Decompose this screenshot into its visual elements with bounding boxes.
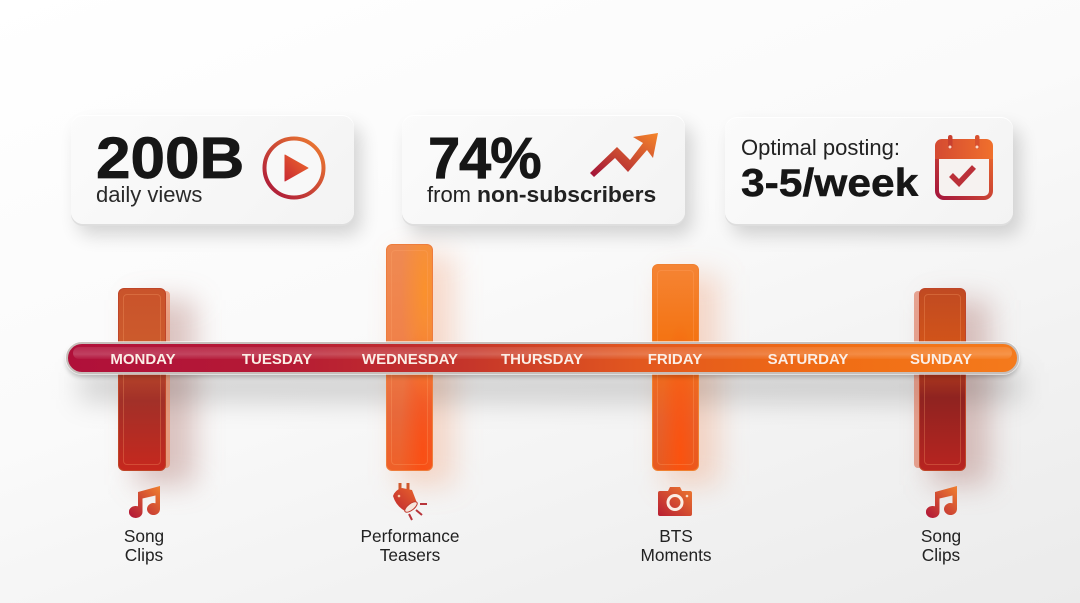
label: BTS Moments (640, 526, 712, 565)
label: Song Clips Monday: Clips (125, 545, 163, 565)
label: BTS Moments: BTS (659, 526, 693, 546)
text: THURSDAY (501, 351, 583, 368)
day labels (110, 351, 972, 368)
label: Song Clips Monday (124, 526, 164, 565)
label: Song Clips Sunday (921, 526, 961, 565)
timeline bar (66, 342, 1019, 374)
label: from non-subscribers: from (427, 182, 471, 207)
icon: calendar with check (935, 135, 993, 200)
text: MONDAY (110, 351, 176, 368)
icon: play button (262, 136, 326, 200)
label: Performance Teasers (361, 526, 459, 565)
label: Song Clips Sunday: Song (921, 526, 961, 546)
bar: Sunday (914, 288, 966, 471)
panel: 74% from non-subscribers (402, 115, 685, 224)
label: Performance Teasers: Teasers (380, 545, 440, 565)
icon: music note Monday (129, 486, 160, 518)
text: SATURDAY (768, 351, 848, 368)
label: Optimal posting: Optimal posting: (741, 135, 900, 160)
label: Song Clips Sunday: Clips (922, 545, 960, 565)
text: FRIDAY (648, 351, 702, 368)
stat: 200B: 200B (96, 126, 244, 191)
bar: Monday (118, 288, 170, 471)
icon: spotlight (393, 483, 427, 520)
panel: optimal posting (725, 117, 1013, 224)
stat: 74%: 74% (428, 126, 540, 191)
icon: rising arrow (590, 133, 658, 177)
text: WEDNESDAY (362, 351, 458, 368)
label: BTS Moments: Moments (640, 545, 712, 565)
stat: 3-5/week: 3-5/week (741, 162, 918, 205)
text: SUNDAY (910, 351, 972, 368)
bar: Friday (652, 264, 699, 471)
icon: music note Sunday (926, 486, 957, 518)
bar: Wednesday (386, 244, 433, 471)
label: Song Clips Monday: Song (124, 526, 164, 546)
label: from non-subscribers: non-subscribers (477, 182, 656, 207)
text: TUESDAY (242, 351, 312, 368)
gloss highlight (73, 347, 1012, 359)
icon: camera (658, 487, 692, 516)
label: daily views: daily views (96, 182, 202, 207)
label: Performance Teasers: Performance (361, 526, 459, 546)
panel: 200B daily views (71, 115, 354, 224)
